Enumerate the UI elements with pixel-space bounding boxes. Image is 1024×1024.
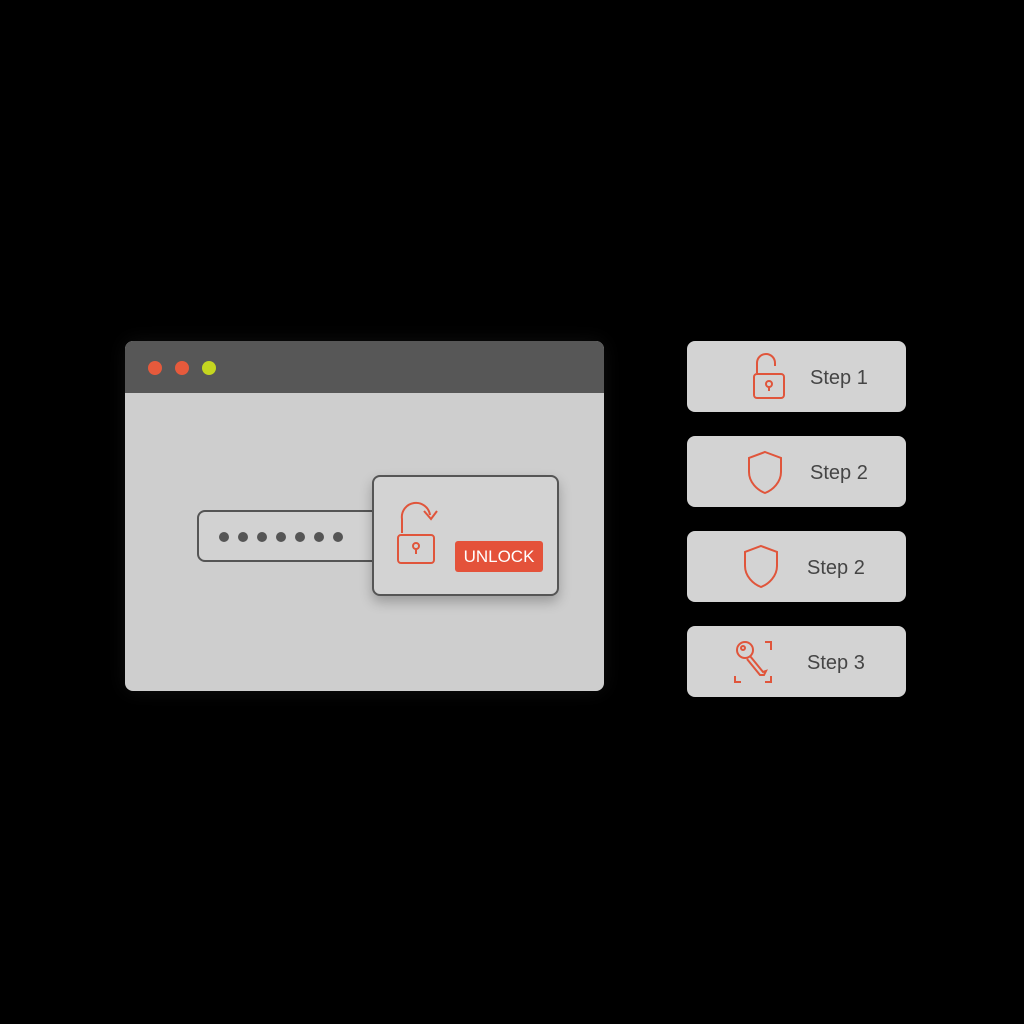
password dots — [219, 532, 343, 542]
icon: open lock — [753, 353, 785, 399]
window dots — [148, 361, 162, 375]
step 2 second: Step 2 — [807, 557, 865, 579]
step 1: Step 1 — [810, 367, 868, 389]
step 2 second — [687, 531, 906, 602]
password field — [197, 510, 391, 562]
icon: shield — [748, 450, 782, 494]
unlock button: UNLOCK — [464, 547, 534, 566]
step 3: Step 3 — [807, 652, 865, 674]
unlock button — [455, 541, 543, 572]
step 2: Step 2 — [810, 462, 868, 484]
browser window — [125, 341, 604, 691]
step 1 — [687, 341, 906, 412]
icon: key scan — [734, 641, 772, 683]
icon: shield — [744, 544, 778, 588]
title bar — [125, 341, 604, 393]
unlock popup — [372, 475, 559, 596]
step 2 — [687, 436, 906, 507]
step 3 — [687, 626, 906, 697]
icon: unlock arrow lock — [397, 502, 438, 564]
